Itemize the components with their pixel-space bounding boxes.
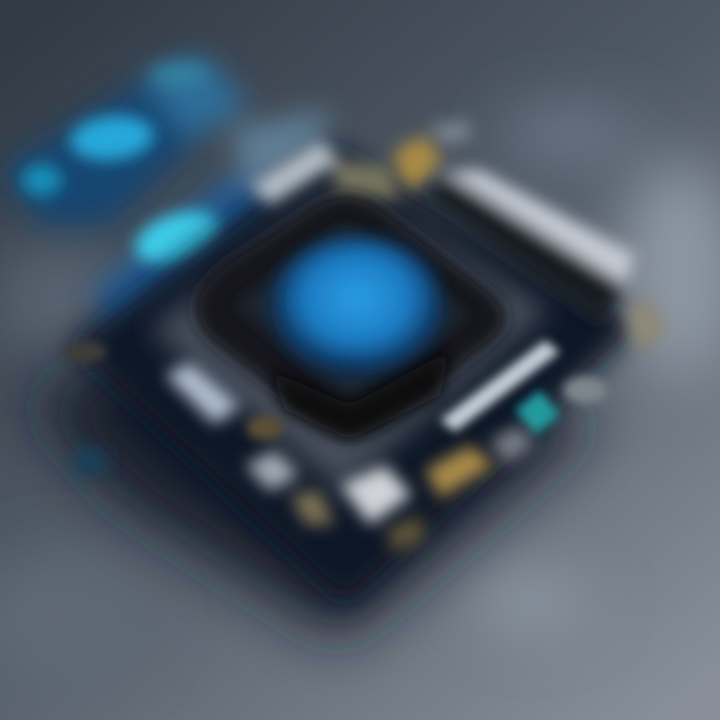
lower right white strip — [440, 340, 560, 432]
icon: teal component — [515, 376, 607, 435]
icon: gold component — [385, 445, 495, 552]
faint cyan reflection — [72, 448, 108, 476]
left edge small parts — [63, 342, 283, 440]
icon: gold block at top — [395, 135, 442, 190]
socket inner ring — [235, 225, 470, 400]
chip upper deck — [150, 180, 550, 490]
floating blue panels — [0, 55, 330, 345]
top pale edge — [250, 120, 470, 205]
dark lower shade of socket — [270, 350, 450, 440]
white lower blocks — [165, 362, 535, 525]
white bar component — [425, 170, 635, 325]
icon: cyan floating highlights — [22, 63, 227, 274]
shadow under chip — [30, 320, 600, 640]
chip base — [63, 120, 668, 605]
central blue disc — [271, 236, 443, 376]
right corner connector — [625, 300, 668, 355]
central dark socket — [194, 194, 506, 435]
